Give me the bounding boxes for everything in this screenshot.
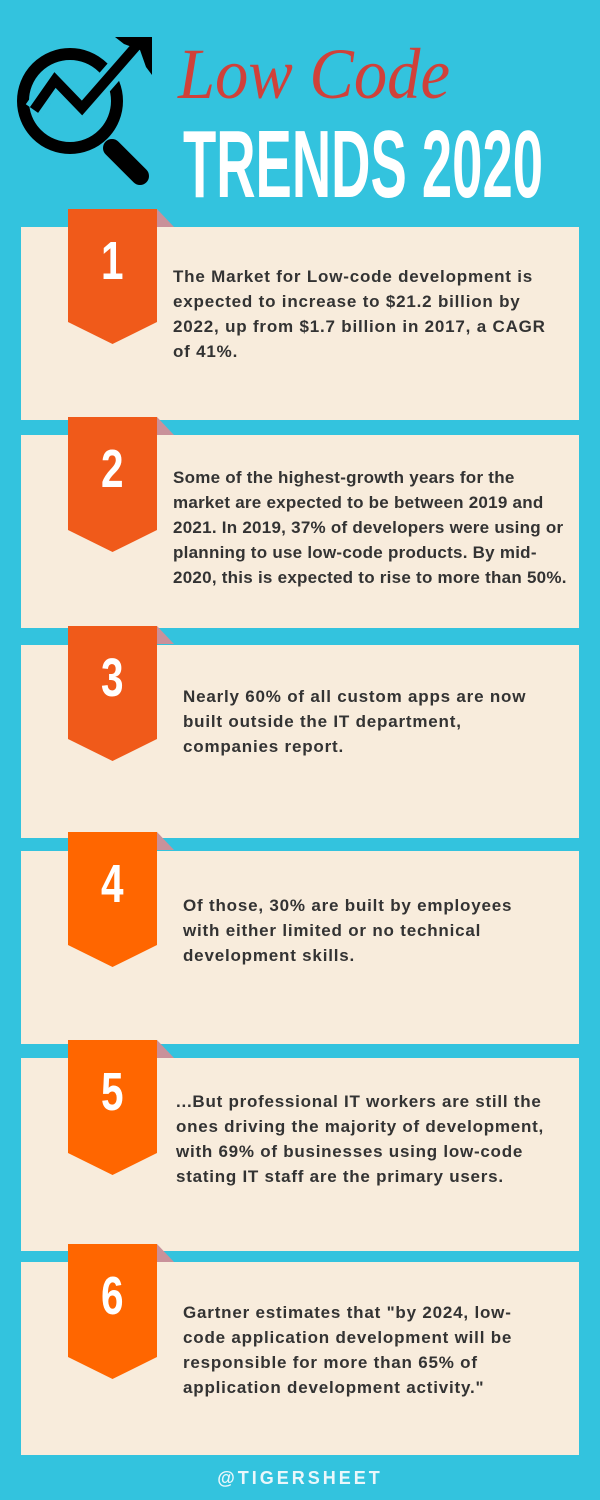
header title and icon bbox=[17, 34, 543, 210]
text 4: Of those, 30% are built by employees bbox=[183, 896, 512, 915]
ribbon 3 bbox=[68, 626, 174, 761]
text 5: stating IT staff are the primary users. bbox=[176, 1167, 504, 1186]
text 2: 2021. In 2019, 37% of developers were using or bbox=[173, 518, 563, 537]
text 1: of 41%. bbox=[173, 342, 238, 361]
ribbon 2 bbox=[68, 417, 174, 552]
text 5 bbox=[176, 1092, 544, 1186]
ribbon 3: 3 bbox=[101, 648, 124, 708]
ribbon 1: 1 bbox=[101, 231, 124, 291]
ribbon 6 bbox=[68, 1244, 174, 1379]
text 3 bbox=[183, 687, 526, 756]
text 6: application development activity." bbox=[183, 1378, 484, 1397]
ribbon 5 bbox=[68, 1040, 174, 1175]
text 5: ...But professional IT workers are still the bbox=[176, 1092, 542, 1111]
panel 2 bbox=[21, 435, 579, 628]
text 1 bbox=[173, 267, 546, 361]
title: Low Code: Low Code bbox=[177, 34, 450, 114]
text 1: The Market for Low-code development is bbox=[173, 267, 533, 286]
text 6: Gartner estimates that "by 2024, low- bbox=[183, 1303, 512, 1322]
text 2 bbox=[173, 468, 567, 587]
ribbon 6: 6 bbox=[101, 1266, 124, 1326]
text 6: responsible for more than 65% of bbox=[183, 1353, 478, 1372]
text 6: code application development will be bbox=[183, 1328, 512, 1347]
text 1: expected to increase to $21.2 billion by bbox=[173, 292, 521, 311]
panel 4 bbox=[21, 851, 579, 1044]
text 4: development skills. bbox=[183, 946, 355, 965]
panel 1 bbox=[21, 227, 579, 420]
text 2: market are expected to be between 2019 and bbox=[173, 493, 544, 512]
text 4: with either limited or no technical bbox=[183, 921, 481, 940]
text 3: companies report. bbox=[183, 737, 344, 756]
text 4 bbox=[183, 896, 512, 965]
panel 6 bbox=[21, 1262, 579, 1455]
panel 5 bbox=[21, 1058, 579, 1251]
icon: magnifier with trend arrow bbox=[23, 37, 152, 176]
text 6 bbox=[183, 1303, 512, 1397]
text 2: 2020, this is expected to rise to more than 50%. bbox=[173, 568, 567, 587]
text 3: built outside the IT department, bbox=[183, 712, 462, 731]
ribbon 2: 2 bbox=[101, 439, 124, 499]
ribbon 4 bbox=[68, 832, 174, 967]
ribbon 5: 5 bbox=[101, 1062, 124, 1122]
text 2: Some of the highest-growth years for the bbox=[173, 468, 515, 487]
panel 3 bbox=[21, 645, 579, 838]
footer: @TIGERSHEET bbox=[217, 1468, 383, 1488]
text 5: ones driving the majority of development, bbox=[176, 1117, 544, 1136]
text 5: with 69% of businesses using low-code bbox=[176, 1142, 523, 1161]
text 3: Nearly 60% of all custom apps are now bbox=[183, 687, 526, 706]
text 1: 2022, up from $1.7 billion in 2017, a CAGR bbox=[173, 317, 546, 336]
ribbon 4: 4 bbox=[101, 854, 124, 914]
ribbon 1 bbox=[68, 209, 174, 344]
text 2: planning to use low-code products. By mid- bbox=[173, 543, 537, 562]
